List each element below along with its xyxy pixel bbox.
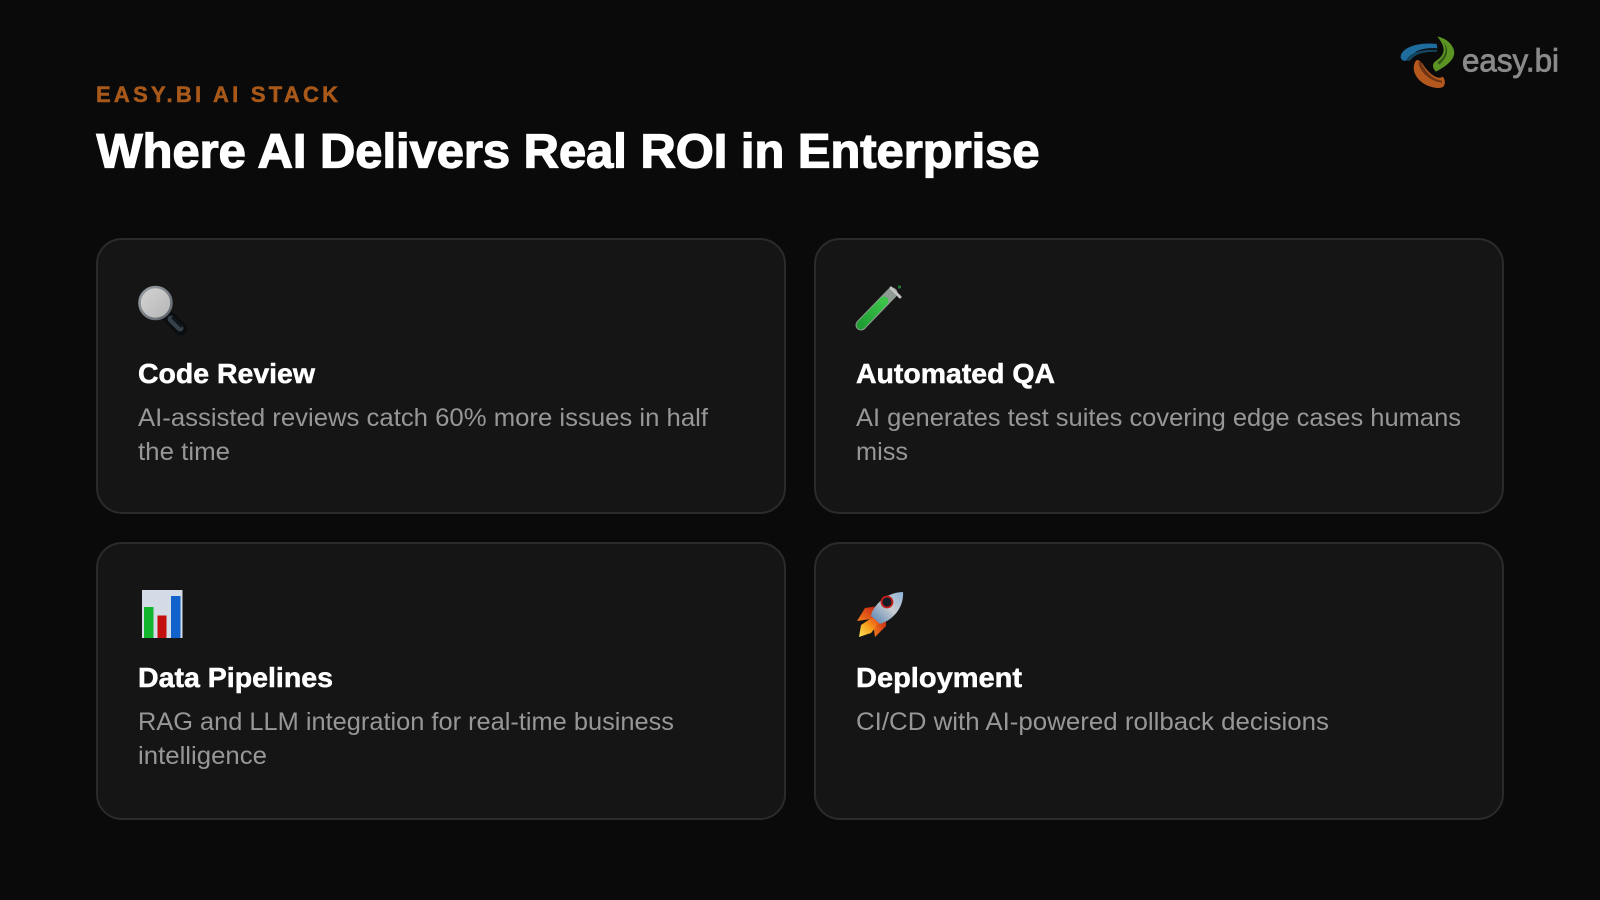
- panel: deployment: [815, 543, 1503, 819]
- title: Where AI Delivers Real ROI in Enterprise: [96, 126, 1040, 178]
- description: data pipelines: RAG and LLM integration for real-time business: [138, 708, 674, 736]
- panel: code review: [97, 239, 785, 513]
- icon: bar chart: [142, 590, 182, 638]
- logo wordmark: easy.bi: [1462, 42, 1559, 78]
- panel: data pipelines: [97, 543, 785, 819]
- card background: [97, 543, 785, 819]
- description: data pipelines: intelligence: [138, 742, 267, 770]
- logo mark: [1401, 37, 1454, 88]
- description: deployment: CI/CD with AI-powered rollback decisions: [856, 708, 1329, 736]
- heading: data pipelines: Data Pipelines: [138, 662, 333, 693]
- eyebrow label: EASY.BI AI STACK: [96, 82, 341, 107]
- card background: [815, 543, 1503, 819]
- description: code review: the time: [138, 438, 230, 466]
- icon: test tube: [861, 285, 901, 325]
- description: automated qa: [856, 404, 1461, 466]
- heading: deployment: Deployment: [856, 662, 1022, 693]
- icon: magnifying glass: [140, 287, 181, 329]
- heading: automated qa: Automated QA: [856, 358, 1055, 389]
- logo: easy.bi: [1401, 37, 1559, 88]
- panel: automated qa: [815, 239, 1503, 513]
- description: automated qa: miss: [856, 438, 908, 466]
- card background: [97, 239, 785, 513]
- icon: rocket: [857, 592, 903, 637]
- description: data pipelines: [138, 708, 674, 770]
- heading: code review: Code Review: [138, 358, 315, 389]
- description: automated qa: AI generates test suites covering edge cases humans: [856, 404, 1461, 432]
- description: code review: [138, 404, 708, 466]
- card background: [815, 239, 1503, 513]
- description: code review: AI-assisted reviews catch 60% more issues in half: [138, 404, 708, 432]
